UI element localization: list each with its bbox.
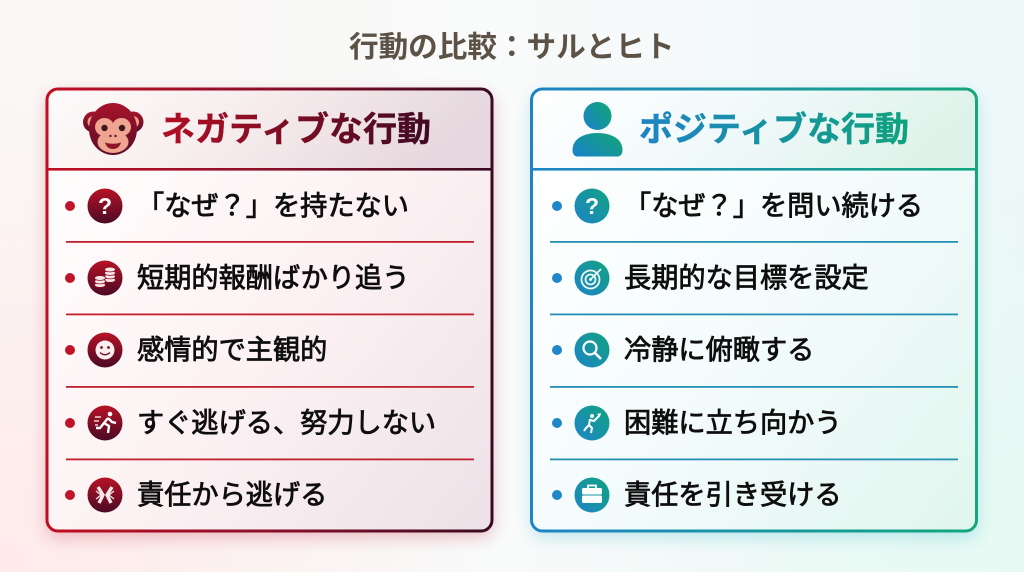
text: emotional: 感情的で主観的 <box>137 334 327 365</box>
icon: coins <box>88 260 122 296</box>
text: calm overview: 冷静に俯瞰する <box>624 334 814 365</box>
icon: target <box>574 260 610 296</box>
panel: negative behaviours <box>46 89 493 538</box>
row 1: negative <box>65 188 409 224</box>
text: no why: 「なぜ？」を持たない <box>137 190 409 221</box>
icon: running <box>88 406 122 440</box>
row 2: positive <box>552 260 869 296</box>
row 4: positive <box>552 406 842 440</box>
title: 行動の比較：サルとヒト <box>349 31 675 64</box>
icon: question: ? <box>585 193 599 219</box>
icon: question <box>574 188 610 224</box>
icon: smile <box>88 332 122 368</box>
row 5: negative <box>65 478 327 512</box>
icon: broken figure <box>88 478 122 512</box>
icon: climbing figure <box>574 406 610 440</box>
icon: person <box>572 102 622 156</box>
text: run away: すぐ逃げる、努力しない <box>137 407 436 438</box>
text: escape responsibility: 責任から逃げる <box>137 479 327 510</box>
header divider: positive <box>532 168 976 171</box>
text: short-term: 短期的報酬ばかり追う <box>137 262 409 293</box>
heading: negative behaviours: ネガティブな行動 <box>161 110 431 149</box>
heading: positive behaviours: ポジティブな行動 <box>639 110 909 149</box>
row 3: negative <box>65 332 327 368</box>
text: face difficulty: 困難に立ち向かう <box>624 407 842 438</box>
row 2: negative <box>65 260 409 296</box>
icon: question <box>88 188 122 224</box>
text: keep asking why: 「なぜ？」を問い続ける <box>624 190 923 221</box>
icon: question: ? <box>98 193 112 219</box>
text: take responsibility: 責任を引き受ける <box>624 479 842 510</box>
row 3: positive <box>552 332 814 368</box>
icon: magnifier <box>574 332 610 368</box>
row 1: positive <box>552 188 923 224</box>
header divider: negative <box>47 168 492 171</box>
row 4: negative <box>65 406 436 440</box>
icon: monkey face <box>83 103 144 155</box>
panel: positive behaviours <box>531 89 978 538</box>
icon: briefcase <box>574 478 610 512</box>
text: long-term goals: 長期的な目標を設定 <box>624 262 869 293</box>
row 5: positive <box>552 478 842 512</box>
